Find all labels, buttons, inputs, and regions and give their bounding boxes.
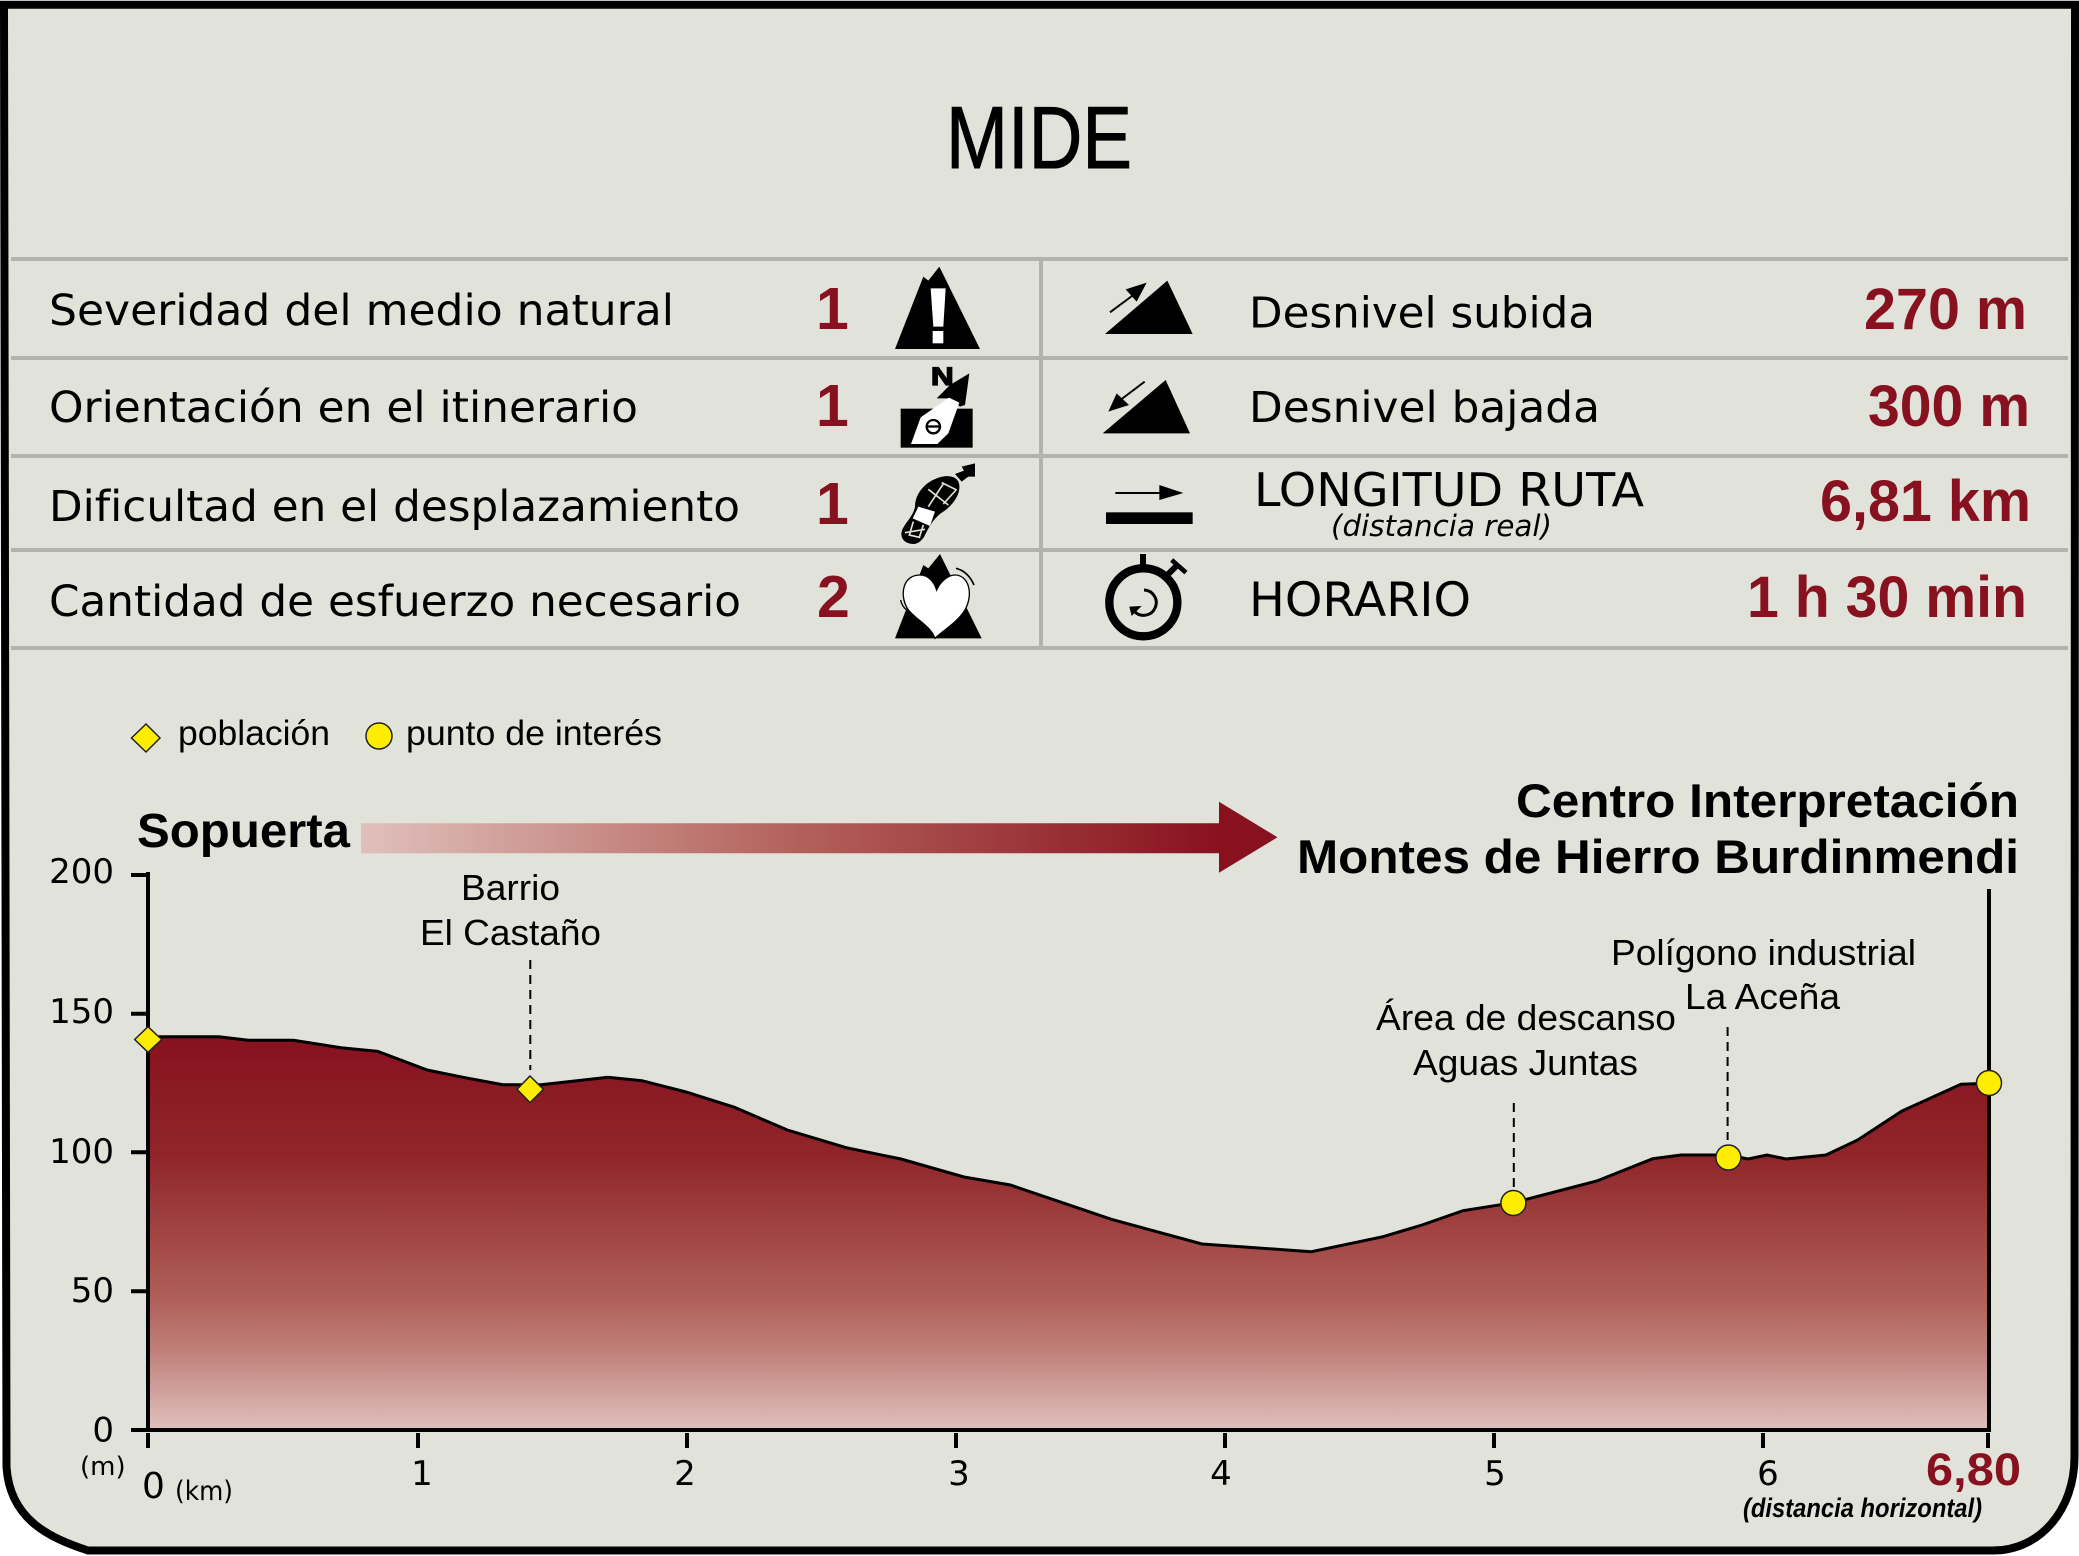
callout: Polígono industrial La Aceña: Polígono industrial bbox=[1611, 932, 1916, 973]
label: distancia real: (distancia real) bbox=[1331, 509, 1552, 543]
route direction arrow bbox=[361, 802, 1278, 873]
row label: orientacion: Orientación en el itinerario bbox=[49, 383, 638, 433]
score: orientacion: 1 bbox=[816, 373, 849, 439]
x axis labels: 6 bbox=[1757, 1454, 1779, 1494]
callout: Área de descanso Aguas Juntas: Aguas Juntas bbox=[1413, 1042, 1638, 1083]
total horizontal distance: 6,80 bbox=[1926, 1444, 2021, 1495]
axes and ticks bbox=[131, 872, 1991, 1448]
x axis zero: 0 bbox=[142, 1466, 165, 1507]
label: desnivel bajada: Desnivel bajada bbox=[1249, 383, 1600, 433]
elevation profile chart bbox=[49, 852, 2021, 1523]
value: length: 6,81 km bbox=[1820, 469, 2031, 534]
profile area bbox=[148, 1037, 1989, 1430]
marker: Aguas Juntas bbox=[1501, 1190, 1526, 1216]
y axis labels: 50 bbox=[71, 1271, 114, 1311]
title: MIDE bbox=[946, 88, 1132, 187]
legend marker: poblacion bbox=[132, 724, 160, 752]
value: descent: 300 m bbox=[1868, 374, 2030, 439]
callout: Área de descanso Aguas Juntas bbox=[1376, 997, 1676, 1083]
icon: boot sole bbox=[901, 463, 975, 544]
legend text: punto de interes: punto de interés bbox=[406, 714, 662, 753]
label: desnivel subida: Desnivel subida bbox=[1249, 288, 1595, 338]
route end label bbox=[1297, 774, 2019, 883]
y axis labels: 150 bbox=[49, 992, 114, 1032]
y axis labels: 200 bbox=[49, 852, 114, 892]
row label: severidad: Severidad del medio natural bbox=[49, 286, 674, 336]
icon: distance bbox=[1106, 485, 1193, 524]
callout: Polígono industrial La Aceña bbox=[1611, 932, 1916, 1017]
legend text: poblacion: población bbox=[178, 714, 330, 753]
callout: Barrio El Castaño bbox=[420, 867, 601, 953]
leader lines bbox=[530, 960, 1728, 1188]
icon: descent bbox=[1103, 380, 1190, 433]
marker: La Aceña bbox=[1716, 1145, 1741, 1170]
callout: Barrio El Castaño: Barrio bbox=[461, 867, 560, 908]
marker: Sopuerta bbox=[135, 1027, 162, 1052]
x axis labels: 3 bbox=[948, 1454, 970, 1494]
x axis labels bbox=[411, 1454, 1779, 1494]
horizontal distance note: (distancia horizontal) bbox=[1743, 1493, 1982, 1523]
icon: ascent bbox=[1105, 281, 1193, 334]
label: horario: HORARIO bbox=[1249, 573, 1471, 628]
row label: esfuerzo: Cantidad de esfuerzo necesario bbox=[49, 577, 741, 627]
icon: compass orientation: N bbox=[931, 364, 954, 391]
x axis labels: 1 bbox=[411, 1454, 433, 1494]
icon: compass orientation bbox=[901, 364, 973, 448]
icon: warning mountain bbox=[895, 267, 980, 349]
legend marker: punto de interes bbox=[366, 723, 392, 749]
score: dificultad: 1 bbox=[816, 471, 849, 537]
x axis unit: (km) bbox=[175, 1476, 233, 1507]
icon: heart effort bbox=[895, 554, 982, 638]
y axis labels: 0 bbox=[92, 1411, 114, 1451]
callout: Área de descanso Aguas Juntas: Área de descanso bbox=[1376, 997, 1676, 1038]
label: longitud ruta: LONGITUD RUTA bbox=[1254, 463, 1645, 517]
route end label: Montes de Hierro Burdinmendi bbox=[1297, 830, 2019, 883]
legend bbox=[132, 714, 662, 753]
callout: Barrio El Castaño: El Castaño bbox=[420, 912, 601, 953]
score: esfuerzo: 2 bbox=[817, 564, 850, 630]
y axis unit: (m) bbox=[80, 1452, 126, 1482]
callout: Polígono industrial La Aceña: La Aceña bbox=[1685, 976, 1841, 1017]
x axis labels: 4 bbox=[1210, 1454, 1232, 1494]
row label: dificultad: Dificultad en el desplazamiento bbox=[49, 482, 740, 532]
score: severidad: 1 bbox=[816, 276, 849, 342]
value: ascent: 270 m bbox=[1864, 277, 2027, 342]
profile line bbox=[148, 1037, 1989, 1252]
y axis labels bbox=[49, 852, 114, 1451]
x axis labels: 2 bbox=[674, 1454, 696, 1494]
icon: stopwatch bbox=[1109, 554, 1186, 636]
marker: route end bbox=[1976, 1070, 2002, 1096]
value: time: 1 h 30 min bbox=[1747, 565, 2027, 630]
y axis labels: 100 bbox=[49, 1132, 114, 1172]
panel: MIDE table bbox=[11, 257, 2068, 650]
marker: El Castaño bbox=[517, 1076, 543, 1103]
x axis labels: 5 bbox=[1484, 1454, 1506, 1494]
route start label: Sopuerta bbox=[137, 805, 350, 858]
icon group bbox=[895, 267, 1193, 638]
route end label: Centro Interpretación bbox=[1516, 774, 2019, 827]
